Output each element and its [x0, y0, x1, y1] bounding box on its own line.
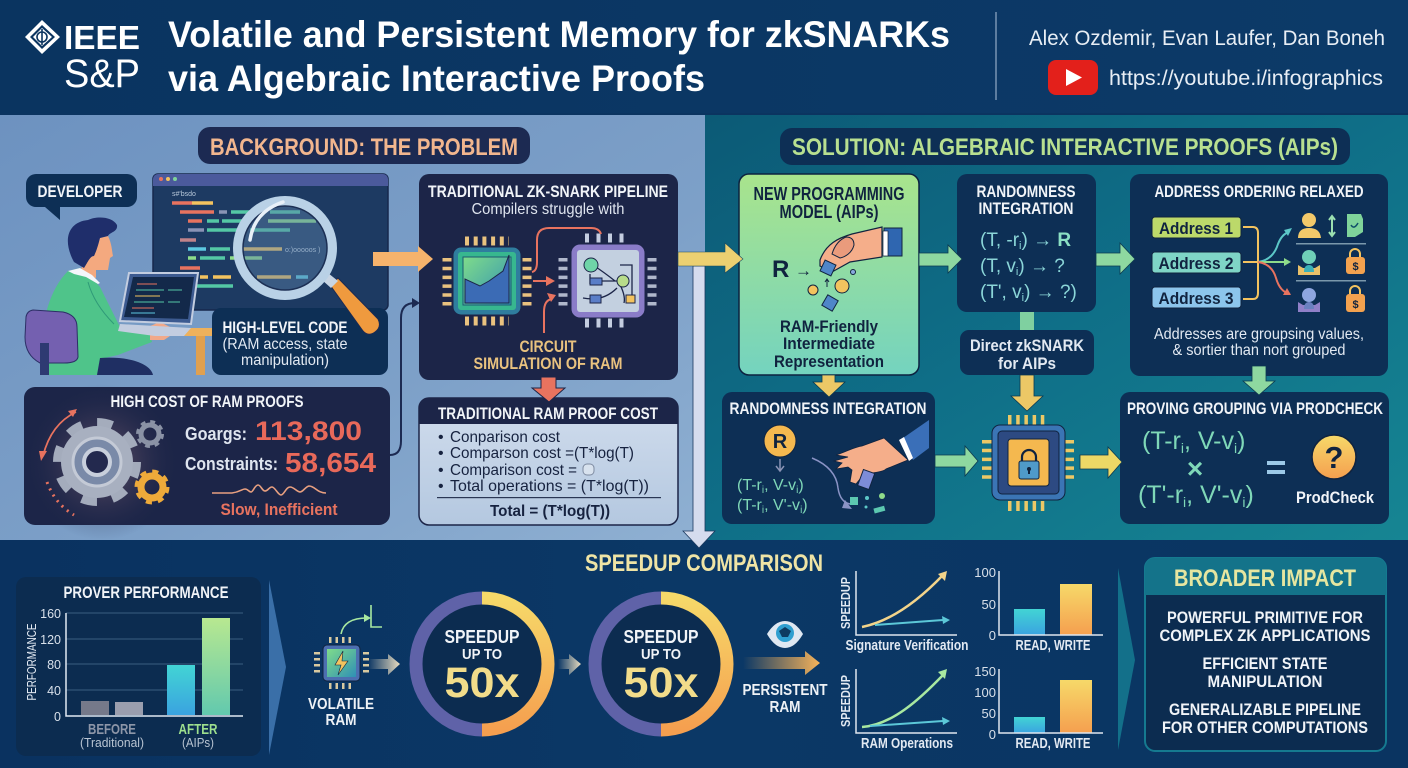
- panel: traditional pipeline: [419, 174, 678, 380]
- formulas: [737, 477, 808, 516]
- icon: R token: R: [773, 431, 788, 453]
- impact item 3: GENERALIZABLE PIPELINE: [1169, 700, 1361, 719]
- formulas: ) → ?): [1024, 282, 1077, 303]
- arrow: model down: [813, 375, 845, 397]
- logo: IEEE S&P: S&P: [64, 52, 140, 96]
- cost list: Comparson cost =(T*log(T): [450, 445, 634, 462]
- cost list: Comparison cost =: [450, 462, 577, 479]
- callout: high-level code: manipulation): [241, 352, 329, 369]
- arrow: persistent: [743, 651, 820, 675]
- bar chart: read write 1: READ, WRITE: [1016, 638, 1091, 654]
- formulas: (T', v: [980, 282, 1022, 303]
- stat: constraints: 58,654: [285, 447, 376, 478]
- bar chart: read write 2: 150: [974, 664, 996, 679]
- product formula: ×: [1187, 453, 1203, 484]
- bar chart: read write 1: 100: [974, 565, 996, 580]
- product formula: , V-v: [1184, 427, 1235, 455]
- address tags: Address 3: [1158, 289, 1234, 308]
- bar chart: prover: 80: [47, 658, 61, 672]
- panel: randomness integration (bottom): [722, 392, 935, 524]
- formulas: ) →: [1022, 230, 1057, 251]
- bar chart: read write 2: [974, 664, 1103, 752]
- panel: prover performance: [16, 577, 261, 756]
- bar chart: prover: PERFORMANCE: [25, 624, 39, 700]
- formulas: i: [762, 505, 764, 516]
- stat: constraints: [185, 447, 376, 478]
- impact item 3: [1162, 700, 1368, 737]
- bar chart: read write 2: 0: [989, 727, 996, 742]
- stat: goargs: Goargs:: [185, 424, 247, 444]
- product formula: (T'-r: [1138, 481, 1183, 509]
- panel: prover performance: PROVER PERFORMANCE: [64, 583, 228, 602]
- icon: hand dropping pieces: [772, 227, 902, 311]
- panel: solution: [705, 115, 1408, 540]
- routing arrows: [1243, 227, 1292, 299]
- product formula: i: [1181, 440, 1184, 456]
- heading: background: BACKGROUND: THE PROBLEM: [210, 134, 518, 161]
- cost list: •: [438, 462, 444, 479]
- icon: volatile RAM chip: [308, 605, 382, 729]
- icon: persistent bulb: [767, 621, 803, 648]
- logo: IEEE S&P: [25, 19, 140, 96]
- slow wave: Slow, Inefficient: [220, 500, 338, 519]
- formulas: R: [1057, 230, 1071, 251]
- bar chart: prover: AFTER: [178, 721, 218, 738]
- icon: hand: [812, 420, 929, 513]
- arrow: randomness to address: [1096, 243, 1135, 274]
- arrow: code to pipeline: [373, 246, 433, 272]
- bar chart: read write 1: 50: [982, 597, 996, 612]
- cost list: Total operations = (T*log(T)): [450, 478, 649, 495]
- bar chart: read write 1: 0: [989, 628, 996, 643]
- arrow: address to prodcheck: [1243, 366, 1275, 395]
- product formula: ): [1237, 427, 1245, 455]
- product formula: i: [1183, 494, 1186, 510]
- stat: goargs: [185, 416, 362, 446]
- address tags: Address 2: [1158, 254, 1234, 273]
- header band: [0, 0, 1408, 113]
- panel: randomness integration (top): RANDOMNESS: [976, 182, 1076, 201]
- icon: magnifying glass: [238, 201, 379, 334]
- line chart: RAM operations: SPEEDUP: [839, 675, 853, 727]
- bar chart: read write 2: 50: [982, 706, 996, 721]
- callout: developer: [26, 174, 137, 220]
- panel: traditional RAM proof cost: [419, 398, 678, 525]
- formulas: , V'-v: [764, 497, 800, 514]
- icon: youtube: [1048, 60, 1098, 95]
- icon: question: ?: [1325, 440, 1343, 475]
- arrow: chip to prodcheck: [1080, 447, 1122, 478]
- developer figure: [25, 217, 212, 375]
- line chart: signature verification: Signature Verification: [846, 638, 968, 654]
- equals: [1267, 461, 1285, 474]
- icons: groups: $: [1352, 261, 1359, 273]
- impact item 3: FOR OTHER COMPUTATIONS: [1162, 718, 1368, 737]
- panel: randomness integration (top): [957, 174, 1096, 312]
- title: via Algebraic Interactive Proofs: [168, 58, 705, 99]
- icon: chip circuit: [563, 238, 652, 323]
- label: persistent RAM: [742, 682, 828, 716]
- icon: R token: [764, 425, 796, 471]
- icon: secure chip: [987, 420, 1069, 506]
- callout: direct zkSNARK: for AIPs: [998, 354, 1056, 373]
- arrow: pipeline down to speedup: [683, 266, 715, 548]
- formulas: ) → ?: [1018, 256, 1065, 277]
- panel: traditional pipeline: TRADITIONAL ZK-SNARK PIPELINE: [428, 182, 668, 201]
- panel: high cost of RAM proofs: [24, 384, 390, 540]
- impact item 2: EFFICIENT STATE: [1202, 654, 1328, 673]
- address tags: Address 1: [1159, 219, 1233, 238]
- formulas: (T, v: [980, 256, 1016, 277]
- donut: speedup 1: 50x: [444, 659, 520, 707]
- monitor with code: s#'bsdo: [172, 191, 196, 198]
- panel: randomness integration (bottom): RANDOMNESS INTEGRATION: [730, 399, 926, 418]
- cost list: Conparison cost: [450, 429, 561, 446]
- icons: groups: [1296, 213, 1366, 312]
- product formula: ): [1245, 481, 1254, 509]
- heading: solution: SOLUTION: ALGEBRAIC INTERACTIVE PROOFS (AIPs): [792, 134, 1338, 161]
- line chart: signature verification: [839, 571, 968, 654]
- stat: constraints: Constraints:: [185, 454, 278, 474]
- donut: speedup 2: 50x: [624, 659, 699, 707]
- donut: speedup 1: SPEEDUP: [444, 627, 520, 647]
- heading: background: [198, 127, 530, 164]
- bar chart: prover: (AIPs): [182, 735, 214, 750]
- label: circuit simulation: CIRCUIT: [520, 337, 577, 356]
- bar chart: prover: (Traditional): [80, 735, 144, 750]
- callout: developer: DEVELOPER: [38, 182, 122, 201]
- label: persistent RAM: PERSISTENT: [742, 682, 828, 699]
- label: RAM-friendly IR: Intermediate: [783, 334, 875, 353]
- icons: groups: $: [1352, 299, 1359, 311]
- impact item 1: COMPLEX ZK APPLICATIONS: [1160, 626, 1370, 645]
- donut: speedup 1: [410, 592, 554, 736]
- donut: speedup 2: [589, 592, 733, 736]
- callout: direct zkSNARK: Direct zkSNARK: [970, 336, 1085, 355]
- panel: address ordering relaxed: [1130, 174, 1388, 376]
- bar chart: prover: 0: [54, 710, 61, 724]
- title: [168, 14, 950, 99]
- connector: randomness to direct: [1020, 312, 1034, 330]
- product formula: , V'-v: [1186, 481, 1243, 509]
- panel: broader impact: BROADER IMPACT: [1174, 565, 1356, 592]
- donut: speedup 1: UP TO: [462, 646, 502, 663]
- arrow: to secure chip (left): [935, 446, 978, 476]
- cost list: [438, 429, 649, 495]
- icon: hand dropping pieces: R: [772, 256, 789, 283]
- line chart: signature verification: SPEEDUP: [839, 577, 853, 629]
- panel: high cost of RAM proofs: HIGH COST OF RAM PROOFS: [110, 392, 304, 411]
- formulas: i: [1019, 240, 1022, 252]
- impact item 1: [1160, 608, 1370, 645]
- label: circuit simulation: [474, 337, 622, 373]
- callout: high-level code: [212, 308, 388, 375]
- formulas: (T, -r: [980, 230, 1019, 251]
- formulas: (T-r: [737, 477, 762, 494]
- line chart: RAM operations: RAM Operations: [861, 736, 953, 752]
- product formula: i: [1242, 494, 1245, 510]
- formulas: ): [798, 477, 804, 494]
- panel: broader impact: [1145, 558, 1386, 751]
- formulas: , V-v: [764, 477, 796, 494]
- bar chart: prover: 120: [40, 633, 61, 647]
- video link: https://youtube.i/infographics: [1109, 67, 1383, 90]
- panel: speedup comparison: [0, 540, 1408, 768]
- icon: volatile RAM chip: VOLATILE: [308, 696, 374, 713]
- cost list: •: [438, 478, 444, 495]
- formulas: [980, 230, 1077, 304]
- cost list: •: [438, 445, 444, 462]
- impact item 2: MANIPULATION: [1208, 672, 1322, 691]
- panel: new programming model: MODEL (AIPs): [780, 202, 878, 222]
- formulas: ): [802, 497, 808, 514]
- formulas: i: [762, 485, 764, 496]
- heading: solution: [780, 128, 1350, 165]
- formulas: i: [800, 505, 802, 516]
- cost list: •: [438, 429, 444, 446]
- bar chart: prover: BEFORE: [88, 721, 136, 738]
- arrow: between donuts: [558, 654, 581, 675]
- note: & sortier than nort grouped: [1172, 342, 1346, 359]
- icon: hand dropping pieces: →: [795, 261, 812, 280]
- arrow: model to randomness: [919, 245, 962, 273]
- label: RAM-friendly IR: [774, 317, 884, 371]
- callout: high-level code: (RAM access, state: [222, 336, 348, 353]
- product formula: [1138, 427, 1254, 510]
- icon: gears: [39, 409, 167, 515]
- panel: traditional pipeline: Compilers struggle with: [472, 201, 624, 218]
- product formula: (T-r: [1142, 427, 1181, 455]
- panel: proving grouping: [1120, 392, 1389, 524]
- label: circuit simulation: SIMULATION OF RAM: [474, 354, 622, 373]
- total: Total = (T*log(T)): [490, 503, 610, 520]
- heading: speedup: SPEEDUP COMPARISON: [585, 550, 823, 577]
- formulas: (T-r: [737, 497, 762, 514]
- formulas: i: [1022, 292, 1024, 304]
- bar chart: read write 1: [974, 565, 1103, 654]
- panel: randomness integration (top): INTEGRATION: [978, 199, 1074, 218]
- arrow: cost to pipeline: [390, 298, 420, 455]
- panel: new programming model: [739, 174, 919, 375]
- stat: goargs: 113,800: [255, 416, 362, 446]
- slow wave: [212, 485, 338, 519]
- icon: chip graph: [447, 241, 527, 321]
- monitor with code: o:)ooooos ): [285, 247, 320, 254]
- chevron: [1118, 568, 1135, 750]
- formulas: i: [796, 485, 798, 496]
- label: RAM-friendly IR: Representation: [774, 352, 884, 371]
- product formula: i: [1234, 440, 1237, 456]
- monitor with code: [153, 174, 388, 310]
- callout: high-level code: HIGH-LEVEL CODE: [222, 318, 348, 337]
- bar chart: prover: 40: [47, 684, 61, 698]
- authors: Alex Ozdemir, Evan Laufer, Dan Boneh: [1029, 27, 1385, 50]
- panel: background, the problem: [0, 115, 705, 540]
- formulas: i: [1016, 266, 1018, 278]
- donut: speedup 2: SPEEDUP: [624, 627, 698, 647]
- note: [1154, 326, 1364, 359]
- note: Addresses are groupsing values,: [1154, 326, 1364, 343]
- logo: IEEE S&P: IEEE: [64, 19, 140, 56]
- arrow: pipeline to solution: [678, 243, 743, 273]
- impact item 2: [1202, 654, 1328, 691]
- bar chart: read write 2: READ, WRITE: [1016, 736, 1091, 752]
- line chart: RAM operations: [839, 669, 957, 752]
- arrow: direct down: [1011, 375, 1043, 411]
- icon: volatile RAM chip: RAM: [326, 712, 356, 729]
- address tags: [1152, 217, 1241, 308]
- arrow: red down: [532, 377, 565, 402]
- bar chart: prover: [25, 607, 243, 750]
- donut: speedup 2: UP TO: [641, 646, 681, 663]
- panel: new programming model: NEW PROGRAMMING: [754, 184, 904, 204]
- label: prodcheck: ProdCheck: [1296, 488, 1374, 507]
- impact item 1: POWERFUL PRIMITIVE FOR: [1167, 608, 1363, 627]
- callout: direct zkSNARK: [960, 330, 1094, 375]
- panel: traditional RAM proof cost: TRADITIONAL RAM PROOF COST: [438, 404, 658, 423]
- label: RAM-friendly IR: RAM-Friendly: [780, 317, 878, 336]
- arrow: volatile to speedup: [368, 654, 400, 675]
- label: persistent RAM: RAM: [770, 699, 800, 716]
- bar chart: read write 2: 100: [974, 685, 996, 700]
- icon: question: [1312, 435, 1356, 479]
- bar chart: prover: 160: [40, 607, 61, 621]
- title: Volatile and Persistent Memory for zkSNARKs: [168, 14, 950, 55]
- chevron: [269, 580, 286, 755]
- arrows: simulation links: [532, 228, 601, 333]
